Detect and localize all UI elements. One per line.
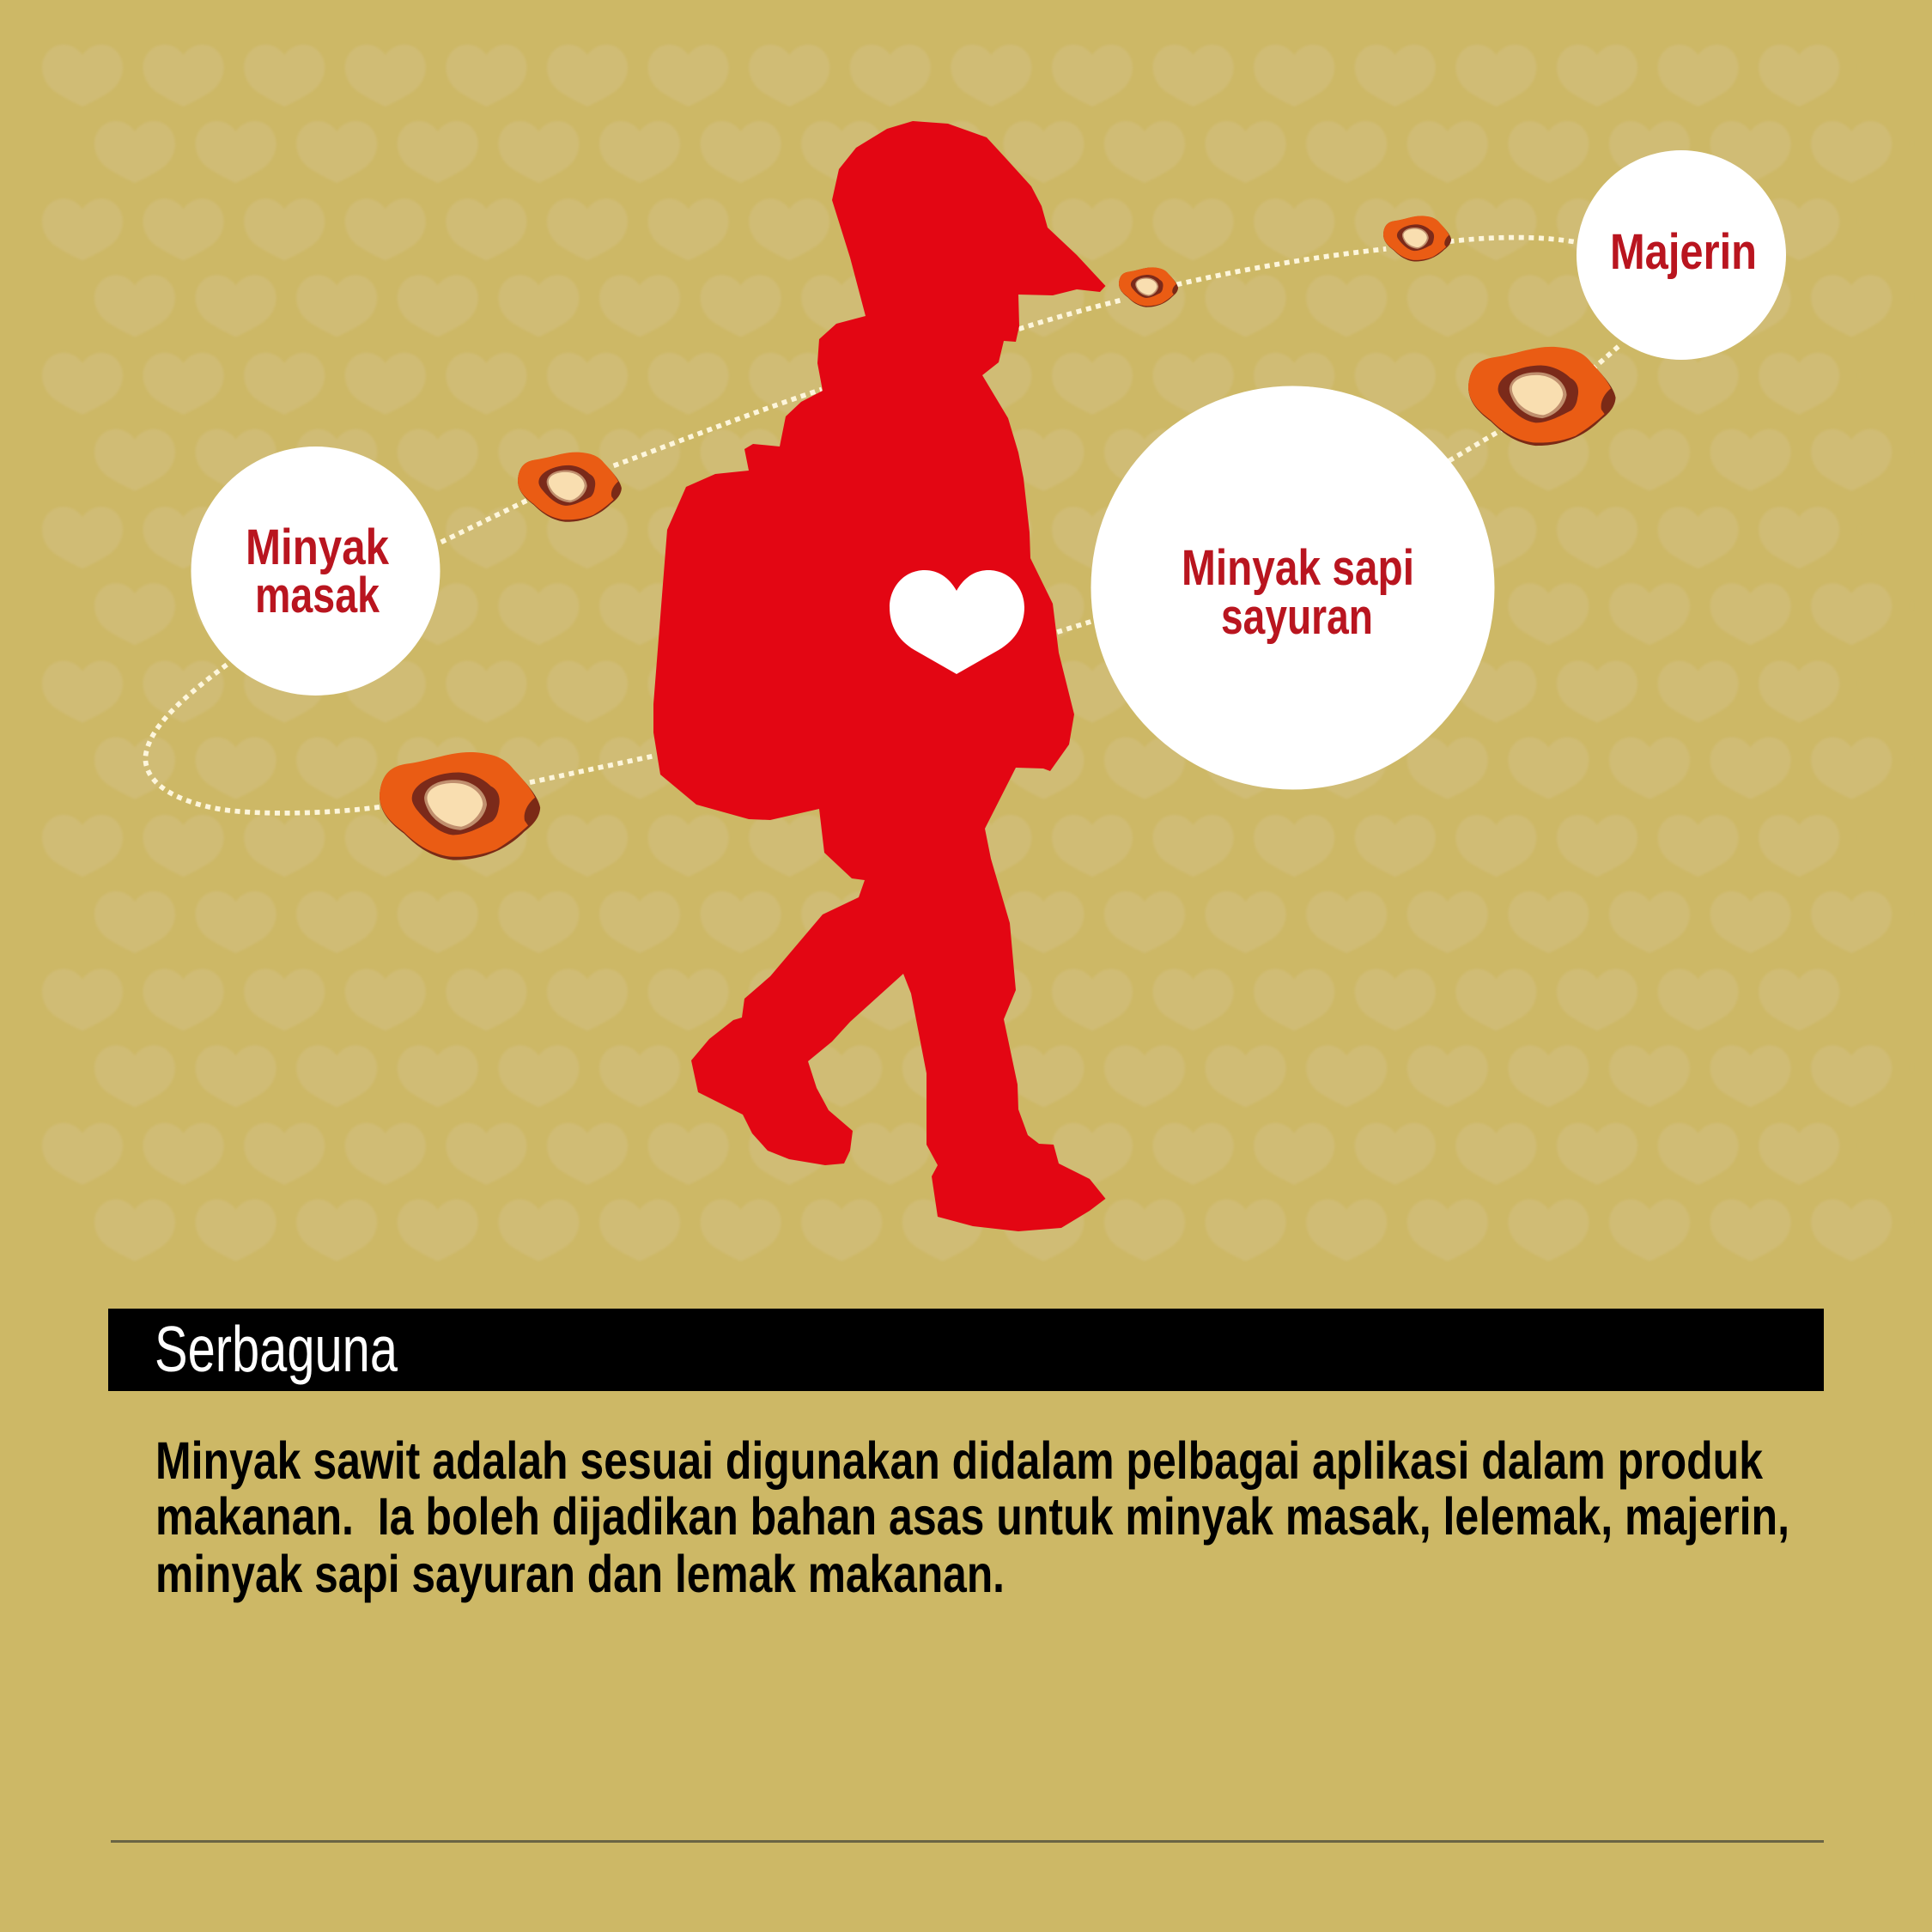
body text: minyak sapi sayuran dan lemak makanan. bbox=[155, 1545, 1005, 1603]
icon: small palm fruit upper right bbox=[1383, 216, 1451, 262]
dotted connector path bbox=[145, 238, 1621, 813]
icon: large palm fruit left bbox=[380, 752, 540, 860]
icon: white heart on child's chest bbox=[890, 570, 1024, 674]
callout: Minyak sapi sayuran: Minyak sapi bbox=[1182, 540, 1414, 596]
child silhouette with backpack bbox=[653, 121, 1106, 1231]
body text bbox=[155, 1431, 1789, 1603]
icon: small palm fruit centre bbox=[1119, 267, 1178, 307]
callout: Majerin: Majerin bbox=[1610, 224, 1757, 280]
icon: medium palm fruit bbox=[518, 453, 622, 522]
icon: large palm fruit right bbox=[1468, 347, 1616, 446]
callout: Minyak masak: Minyak bbox=[246, 519, 390, 575]
callout: Majerin bbox=[1577, 150, 1786, 360]
callout: Minyak masak bbox=[191, 447, 440, 696]
callout: Minyak masak: masak bbox=[255, 568, 380, 623]
heading bar: Serbaguna bbox=[108, 1309, 1824, 1391]
callout: Minyak sapi sayuran: sayuran bbox=[1221, 589, 1373, 645]
callout: Minyak sapi sayuran bbox=[1091, 386, 1494, 790]
heading bar: Serbaguna: Serbaguna bbox=[155, 1313, 398, 1385]
